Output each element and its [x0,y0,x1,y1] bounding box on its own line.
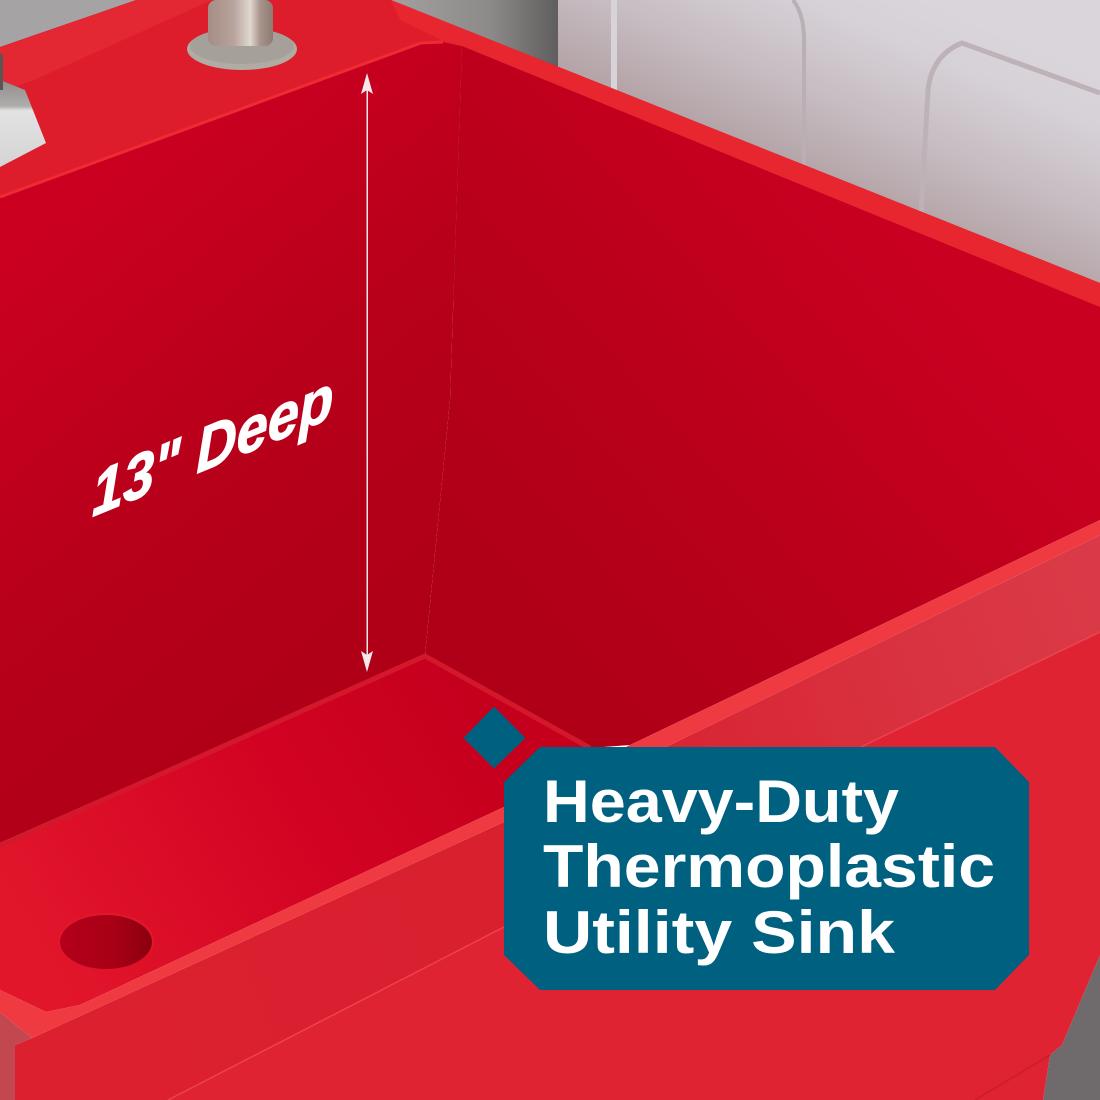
depth arrow [361,73,373,672]
callout panel: Heavy-Duty [543,768,900,835]
drain hole [58,913,154,969]
sink right inner wall [425,46,1100,748]
callout panel: Thermoplastic [543,833,995,900]
background: white cabinet [558,0,1100,300]
sink outer front [168,632,1100,1100]
callout panel: Utility Sink [543,899,896,966]
sink rim deck [0,0,1100,310]
sink left inner wall [0,42,462,843]
front rim highlight [0,520,1100,1038]
callout diamond [465,708,524,767]
callout panel [504,747,1029,990]
faucet base left [0,54,46,167]
background: gray wall [0,0,558,300]
front rim face [15,535,1100,1100]
background: dark gap at lower right [1043,955,1100,1100]
depth label: 13" Deep [92,361,333,531]
sink floor [0,655,590,1012]
faucet base right [187,0,297,70]
